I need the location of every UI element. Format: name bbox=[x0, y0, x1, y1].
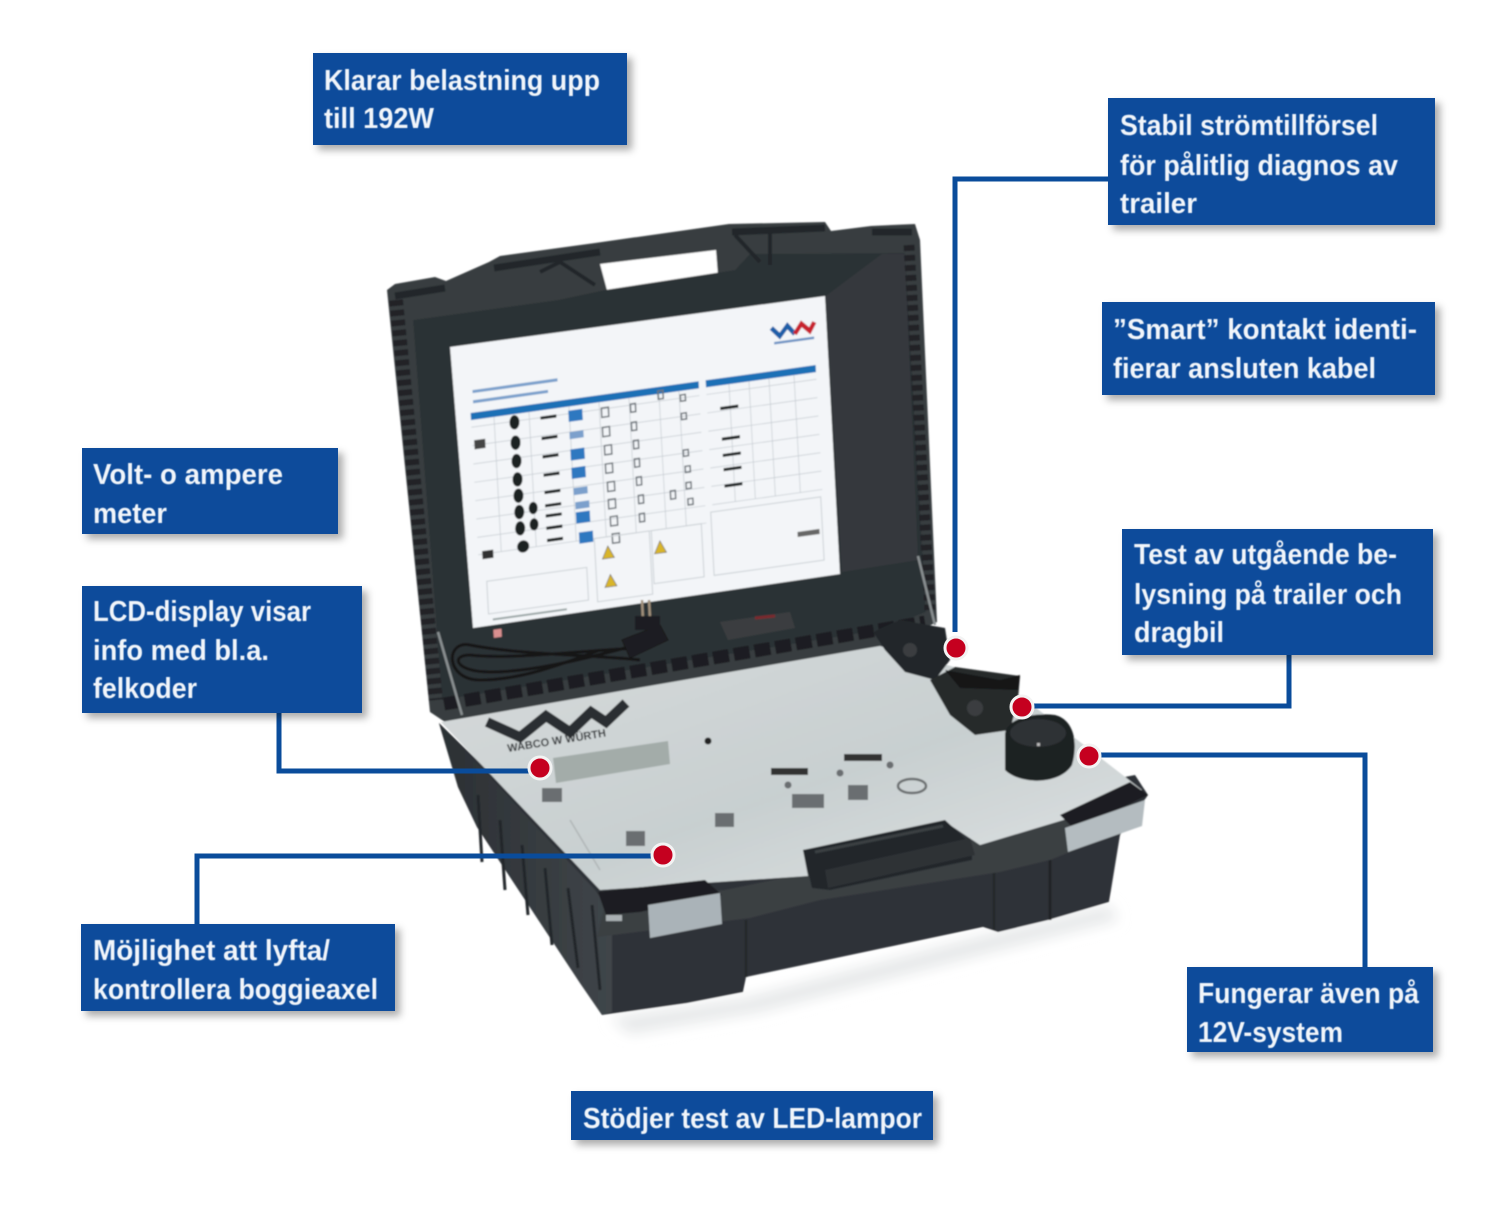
buttons and switches bbox=[542, 738, 926, 846]
callout: klarar belastning: Klarar belastning upp bbox=[324, 65, 600, 97]
warning triangles bbox=[602, 538, 668, 588]
connector sockets bbox=[873, 620, 1075, 781]
callout: volt- o amperemeter: meter bbox=[93, 498, 167, 530]
marker dot: boggieaxel bbox=[652, 844, 674, 866]
callout: stabil strömtillförsel: för pålitlig diagnos av bbox=[1120, 150, 1398, 182]
callout: led-lampor bbox=[571, 1091, 933, 1140]
callout: boggieaxel bbox=[81, 924, 395, 1011]
corner latches bbox=[598, 782, 1148, 938]
leader line: boggieaxel bbox=[197, 856, 652, 924]
callout: lcd-display bbox=[82, 586, 362, 713]
callout: test av belysning: dragbil bbox=[1134, 617, 1224, 649]
callout: smart kontakt bbox=[1102, 302, 1435, 395]
callout: stabil strömtillförsel bbox=[1108, 98, 1435, 225]
callout: boggieaxel: Möjlighet att lyfta/ bbox=[93, 935, 330, 967]
callout: klarar belastning bbox=[313, 53, 627, 145]
wabco würth logo bbox=[487, 703, 626, 737]
top plate: WABCO W WÜRTH bbox=[506, 727, 607, 755]
callout: lcd-display: info med bl.a. bbox=[93, 635, 269, 667]
leader line: stabil strömtillförsel bbox=[955, 179, 1108, 632]
callout: 12V-system bbox=[1187, 967, 1433, 1052]
callout: stabil strömtillförsel: Stabil strömtillförsel bbox=[1120, 110, 1378, 142]
callout: led-lampor: Stödjer test av LED-lampor bbox=[583, 1103, 922, 1135]
centre carry handle bbox=[803, 820, 975, 890]
callout: 12V-system: Fungerar även på bbox=[1198, 978, 1420, 1010]
logo on sheet bbox=[771, 322, 815, 337]
power cable and plug bbox=[452, 600, 795, 680]
callout: smart kontakt: ”Smart” kontakt identi- bbox=[1113, 314, 1417, 346]
instruction sheet paper bbox=[450, 296, 840, 628]
case base body bbox=[439, 723, 1148, 1015]
case lid bbox=[387, 222, 937, 722]
instruction sheet contents bbox=[468, 322, 829, 639]
callout: lcd-display: LCD-display visar bbox=[93, 596, 311, 628]
callout: smart kontakt: fierar ansluten kabel bbox=[1113, 353, 1376, 385]
callout: volt- o amperemeter bbox=[82, 448, 338, 534]
leader line: lcd-display bbox=[279, 713, 530, 771]
marker dot: lcd-display bbox=[529, 757, 551, 779]
marker dot: test av utgående belysning bbox=[1011, 696, 1033, 718]
marker dot: stabil strömtillförsel bbox=[945, 637, 967, 659]
callout: 12V-system: 12V-system bbox=[1198, 1017, 1343, 1049]
callout: volt- o amperemeter: Volt- o ampere bbox=[93, 459, 283, 491]
callout: lcd-display: felkoder bbox=[93, 673, 197, 705]
marker dot: fungerar på 12V bbox=[1078, 745, 1100, 767]
callout: test av belysning bbox=[1122, 529, 1433, 655]
callout: stabil strömtillförsel: trailer bbox=[1120, 188, 1197, 220]
callout: test av belysning: Test av utgående be- bbox=[1134, 539, 1397, 571]
leader line: test av utgående belysning bbox=[1034, 655, 1289, 706]
floor shadow bbox=[610, 905, 1118, 1034]
leader line: fungerar på 12V bbox=[1100, 755, 1365, 967]
lcd display bbox=[553, 741, 670, 783]
callout: klarar belastning: till 192W bbox=[324, 103, 435, 135]
callout: test av belysning: lysning på trailer och bbox=[1134, 579, 1402, 611]
callout: boggieaxel: kontrollera boggieaxel bbox=[93, 974, 378, 1006]
top plate bbox=[441, 646, 1142, 890]
product photo: open test case bbox=[387, 222, 1148, 1034]
